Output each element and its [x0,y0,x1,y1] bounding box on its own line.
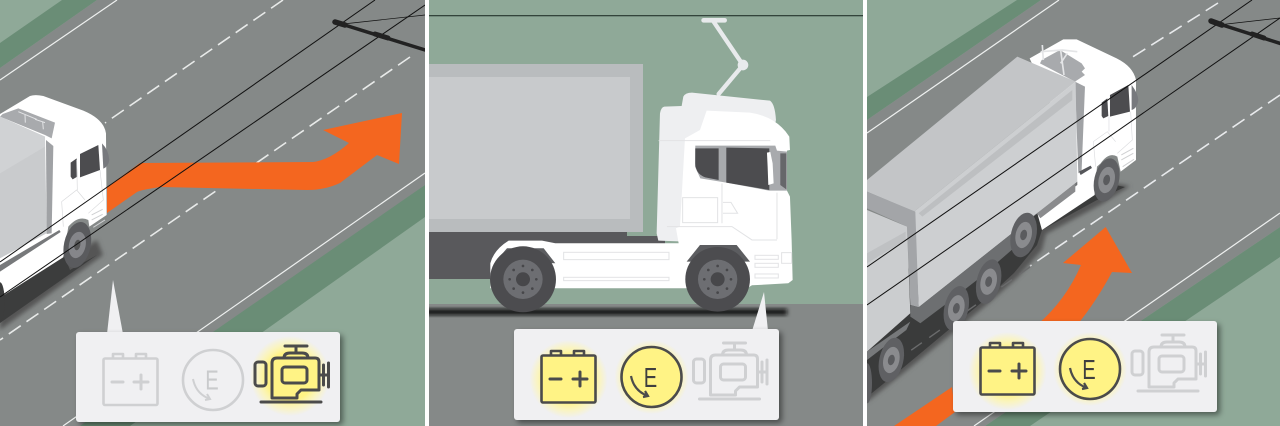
second trailer [867,210,910,352]
window small [1102,98,1108,118]
side skirt [1079,166,1092,175]
icon: engine (off) [694,343,767,399]
catenary pole [1211,21,1280,44]
cab panel lines [564,141,792,281]
icon card [76,332,340,422]
catenary pole [335,22,425,50]
window pillar frame [695,146,787,191]
icon: E-motor (off): E [205,365,219,396]
grille [92,209,105,227]
roof struts [18,112,45,129]
background [429,0,863,304]
trailer gap [867,192,919,307]
icon: battery (off) [104,354,158,405]
truck [863,39,1138,403]
icon: E-motor (on) [614,340,688,414]
lane dashes [0,0,410,340]
callout pointer [107,280,123,334]
trailer side stripe [919,90,1072,217]
grille [1121,148,1134,167]
verge upper [867,0,1041,120]
icon card [514,329,779,420]
dim dashes under truck [890,267,1030,365]
truck shadow [0,240,103,330]
rear wheel [490,246,556,312]
front wheel [685,245,750,312]
road [867,0,1280,426]
front window [726,148,769,190]
roof equipment [1040,45,1085,82]
panel: charging while driving [863,0,1280,426]
overhead wires [0,0,425,297]
road edge lines [0,0,425,426]
pantograph [704,20,748,94]
panel: battery and electric side view [425,0,863,426]
wheels [863,156,1124,403]
panel: engine mode [0,0,425,426]
chassis under [910,182,1077,323]
trailer pillar [46,140,53,234]
icon: battery (on) [968,332,1046,410]
orange arrow [894,227,1132,426]
wheel [63,222,92,268]
cab [0,95,107,298]
overhead wire [429,15,863,16]
icon: E-motor (on): E [644,363,657,394]
road verge [0,0,97,68]
trailer [429,64,643,232]
trailer side [914,82,1077,307]
road surface [429,304,863,426]
orange arrow [107,113,402,213]
mirror [767,152,774,185]
cab [1030,39,1136,230]
mirror [102,143,109,169]
lane dashes [1030,3,1280,266]
rear wheel edge [0,282,4,298]
truck [0,95,110,295]
mirror [1132,85,1138,110]
deflector [0,108,55,138]
trailer [0,117,47,258]
icon: E-motor (off) [183,350,243,410]
second trailer under [867,322,910,360]
skirt band [1037,183,1075,218]
icon: engine (on) [250,336,330,416]
icon: E-motor (on) [1053,332,1127,406]
road edge lines [867,0,1280,426]
grass background [0,0,425,426]
truck shadow [867,170,1130,402]
chassis shadow [429,232,665,279]
grass background [867,0,1280,426]
door lines [1093,112,1132,167]
pillar [1075,82,1085,173]
chassis and cab [490,111,793,288]
icon: E-motor (on): E [1082,355,1096,386]
window [80,145,100,177]
icon: engine (off) [1132,335,1206,391]
trailer roof fold [8,120,44,136]
window [1110,85,1130,117]
verge lower [50,185,425,426]
icon: battery (on) [530,340,608,418]
verge lower [985,227,1280,426]
road [0,0,425,426]
side skirt [0,230,61,272]
side window [695,148,719,180]
ground shadow [425,309,787,315]
door lines [62,160,103,227]
callout pointer [752,292,768,331]
second trailer stripe [867,232,906,263]
overhead wires [867,0,1280,305]
trailer top [867,57,1076,212]
icon card [953,321,1217,412]
window small [71,158,77,179]
windscreen [780,153,786,189]
side truck [490,20,793,312]
rear cab [657,93,776,242]
